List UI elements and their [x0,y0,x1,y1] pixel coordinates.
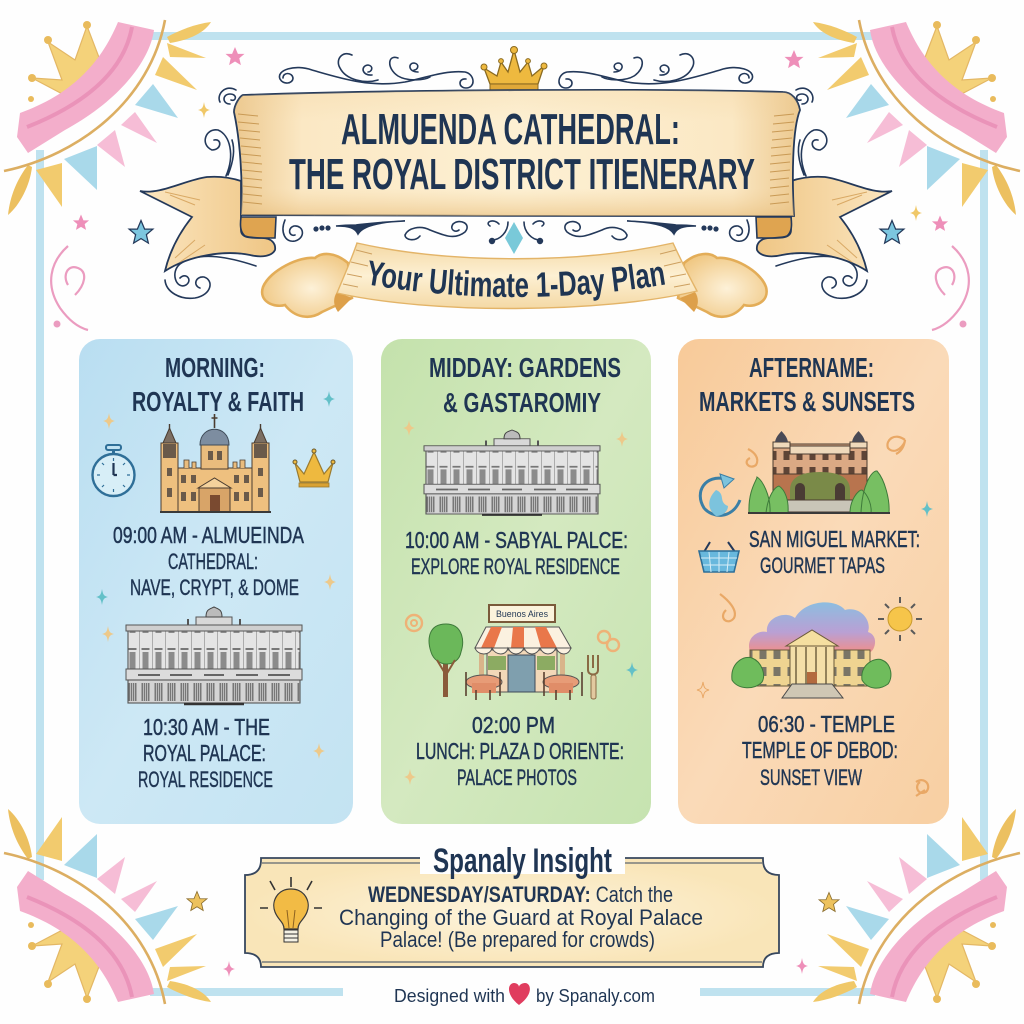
illustration: cathedral [160,414,271,513]
corner: top right bunting and crown [813,20,1020,215]
midday stop 2 text: LUNCH: PLAZA D ORIENTE: [416,738,624,764]
afternoon heading [699,352,915,417]
flourish diamond [505,222,523,254]
left banner tail [140,177,276,271]
side curls right [776,88,867,298]
morning stop 2 text: 10:30 AM - THE [143,714,270,740]
subtitle ribbon [260,242,768,318]
main title banner [234,90,800,216]
title line 1: ALMUENDA CATHEDRAL: [341,105,680,154]
icon: light bulb [260,877,322,942]
side curls left [165,88,256,298]
icon: shopping basket [699,542,739,572]
corner: top left bunting and crown [4,20,211,215]
morning stop 1 text [113,522,304,600]
morning stop 1 text: CATHEDRAL: [168,549,258,574]
afternoon stop 1 text [749,526,920,578]
afternoon heading: MARKETS & SUNSETS [699,386,915,417]
midday stop 1 text: EXPLORE ROYAL RESIDENCE [411,554,620,579]
afternoon stop 2 text [742,711,898,790]
afternoon stop 1 text: SAN MIGUEL MARKET: [749,526,920,552]
morning stop 1 text: NAVE, CRYPT, & DOME [130,575,299,600]
morning heading: ROYALTY & FAITH [132,386,304,417]
illustration: sabyal palace [424,430,600,515]
icon: sun [878,597,922,641]
lower flourish right [524,220,749,243]
morning stop 2 text: ROYAL RESIDENCE [138,767,273,792]
top flourish right [559,54,753,88]
midday stop 1 text [405,527,628,579]
afternoon heading: AFTERNAME: [749,352,874,383]
illustration: cafe with tree and fork: Buenos Aires [496,609,548,619]
icon: stopwatch [92,445,134,496]
insight text: WEDNESDAY/SATURDAY: Catch the [368,882,673,907]
corner: bottom right bunting and crown [813,809,1020,1004]
insight text: Palace! (Be prepared for crowds) [380,927,655,952]
icon: globe with arrow [700,474,740,516]
corner: bottom left bunting and crown [4,809,211,1004]
afternoon stop 2 text: SUNSET VIEW [760,765,862,790]
illustration: cafe with tree and fork [429,605,598,700]
illustration: brick building with trees [748,431,890,514]
afternoon stop 2 text: 06:30 - TEMPLE [758,711,895,737]
illustration: temple under sunset sky [732,602,891,698]
morning stop 2 text [138,714,273,792]
afternoon stop 2 text: TEMPLE OF DEBOD: [742,737,898,763]
icon: crown [293,449,335,487]
afternoon stop 1 text: GOURMET TAPAS [760,553,885,578]
midday stop 2 text [416,712,624,790]
midday stop 2 text: PALACE PHOTOS [457,765,577,790]
morning stop 2 text: ROYAL PALACE: [143,740,266,766]
morning heading [132,352,304,417]
afternoon sparkles and swirls [697,437,933,796]
morning sparkles [96,391,336,759]
icon: heart [509,983,530,1005]
panel: midday [381,339,651,824]
midday heading: & GASTAROMIY [443,387,601,418]
title crown [481,46,547,91]
insight text: Changing of the Guard at Royal Palace [339,905,703,930]
insight text [339,882,703,952]
morning stop 1 text: 09:00 AM - ALMUEINDA [113,522,304,548]
title line 2: THE ROYAL DISTRICT ITIENERARY [289,150,755,199]
panel: spanaly insight [245,842,779,967]
footer credit: by Spanaly.com [536,986,655,1006]
insight heading: Spanaly Insight [433,842,612,880]
illustration: royal palace [126,607,302,704]
panel: morning [79,339,353,824]
panel: afternoon [678,339,949,824]
subtitle text: Your Ultimate 1-Day Plan [369,260,665,301]
midday stop 1 text: 10:00 AM - SABYAL PALCE: [405,527,628,553]
right banner tail [756,177,892,271]
top flourish left [279,54,473,88]
midday stop 2 text: 02:00 PM [472,712,555,738]
morning heading: MORNING: [165,352,265,383]
midday sparkles and swirls [403,420,638,785]
midday heading [429,352,621,418]
lower flourish left [283,220,508,243]
midday heading: MIDDAY: GARDENS [429,352,621,383]
footer credit: Designed with [394,986,505,1006]
footer credit [394,983,655,1006]
